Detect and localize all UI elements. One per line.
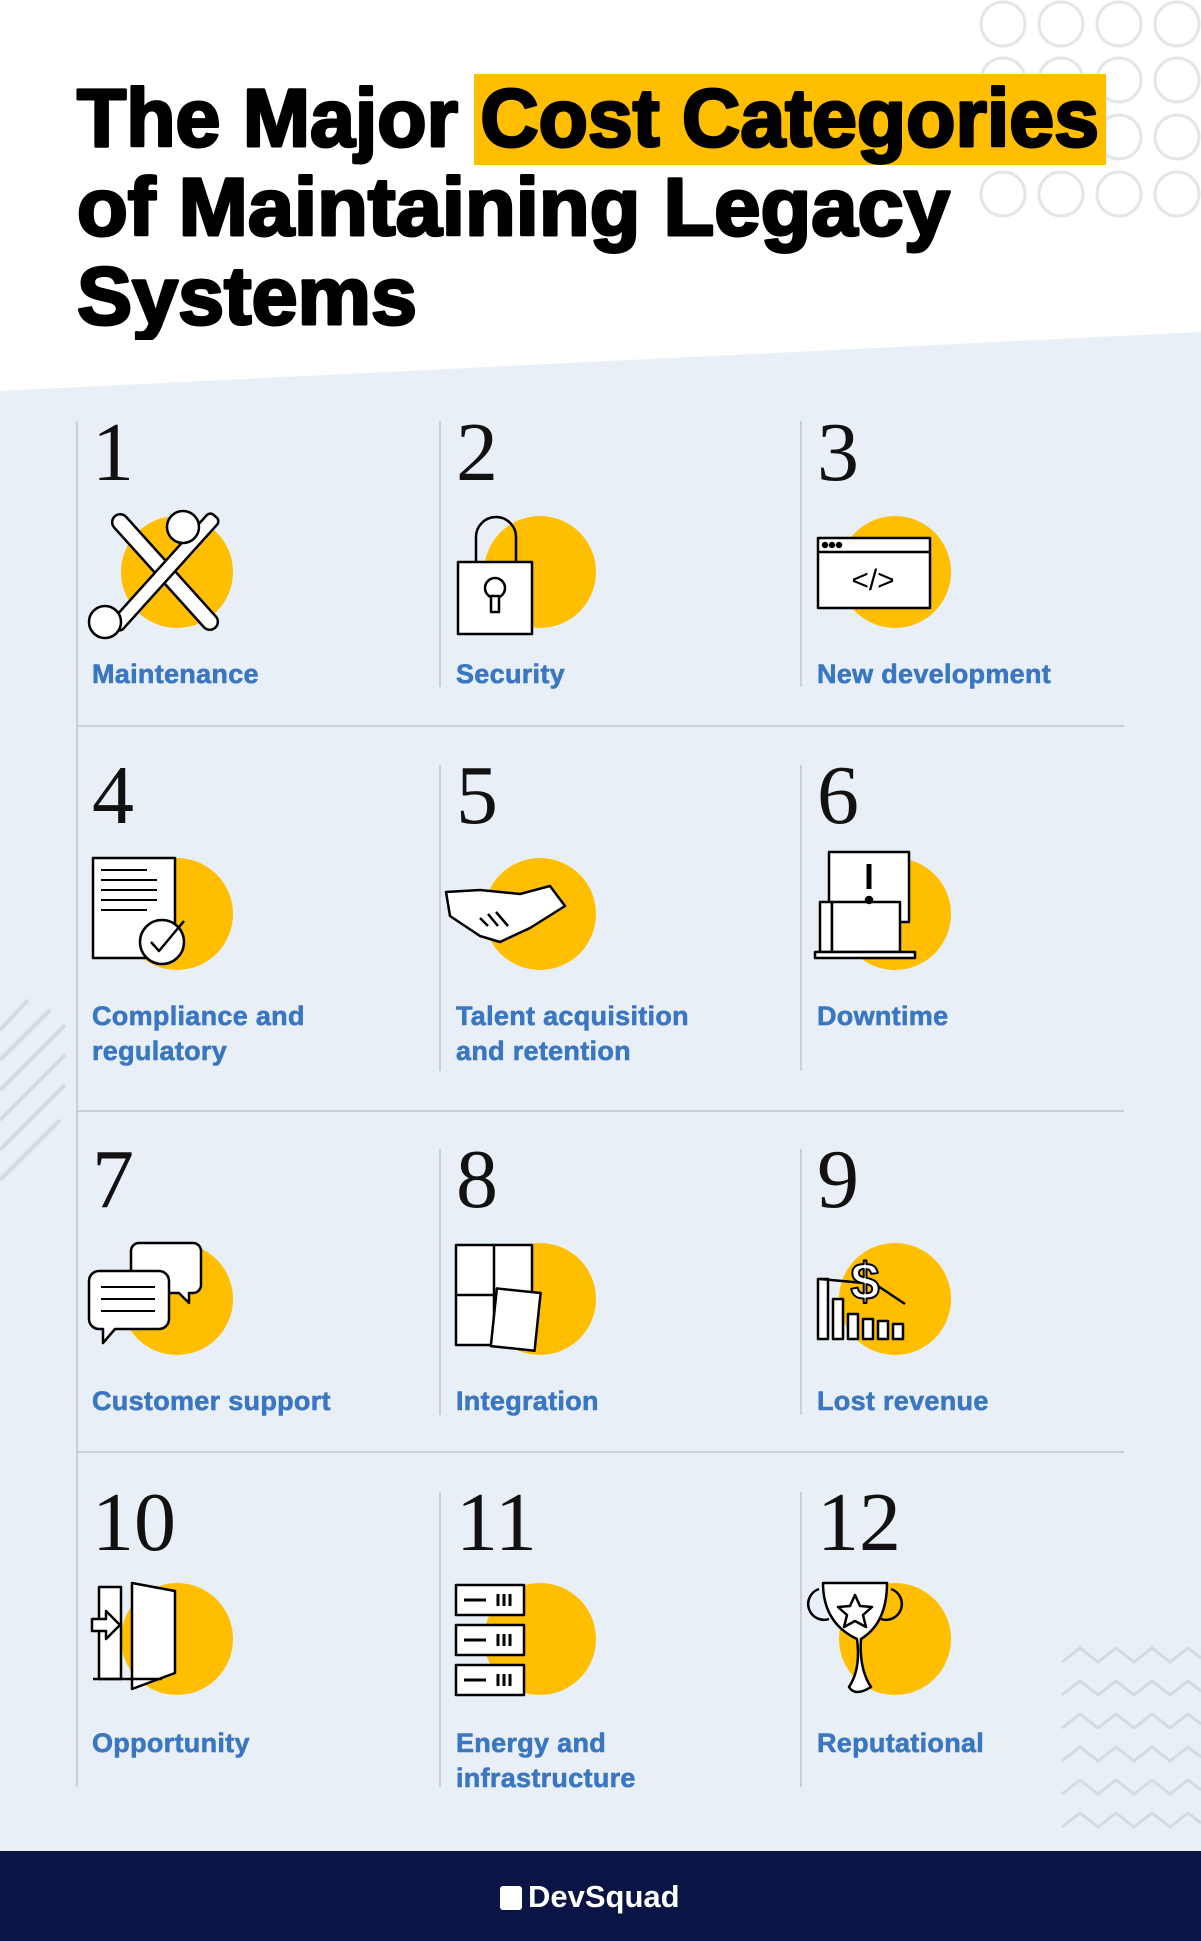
item 5: 5 bbox=[456, 749, 498, 842]
item 7 bbox=[92, 1133, 331, 1416]
item 8 bbox=[456, 1133, 599, 1416]
item 9 bbox=[817, 1133, 989, 1416]
item 6 bbox=[817, 749, 948, 1031]
title: The Major Cost Categories bbox=[77, 73, 1099, 164]
item 1 bbox=[92, 406, 259, 689]
icon: trophy bbox=[808, 1583, 951, 1695]
icon: monitor alert bbox=[815, 852, 951, 970]
item 7: 7 bbox=[92, 1133, 134, 1226]
item 11: infrastructure bbox=[456, 1763, 636, 1793]
item 1: Maintenance bbox=[92, 659, 259, 689]
icon: tools bbox=[89, 511, 233, 638]
icon: lock bbox=[458, 516, 596, 634]
icon: chat bubbles bbox=[89, 1243, 233, 1355]
item 4: regulatory bbox=[92, 1036, 227, 1066]
item 5: Talent acquisition bbox=[456, 1001, 689, 1031]
item 8: Integration bbox=[456, 1386, 599, 1416]
item 12: 12 bbox=[817, 1476, 901, 1569]
icon: document check bbox=[93, 858, 233, 970]
item 3 bbox=[817, 406, 1051, 689]
icon: code window bbox=[818, 516, 951, 628]
icon: puzzle bbox=[456, 1243, 596, 1355]
item 10: Opportunity bbox=[92, 1728, 250, 1758]
item 2: 2 bbox=[456, 406, 498, 499]
footer bbox=[0, 1851, 1201, 1941]
title bbox=[76, 73, 1106, 340]
item 11 bbox=[456, 1476, 636, 1793]
item 11: 11 bbox=[456, 1476, 537, 1569]
item 4: Compliance and bbox=[92, 1001, 305, 1031]
item 11: Energy and bbox=[456, 1728, 606, 1758]
title: Systems bbox=[77, 251, 417, 340]
item 6: 6 bbox=[817, 749, 859, 842]
item 3: New development bbox=[817, 659, 1051, 689]
item 4 bbox=[92, 749, 305, 1066]
icon: servers bbox=[456, 1583, 596, 1695]
icon: handshake bbox=[446, 858, 596, 970]
icon: revenue chart bbox=[818, 1243, 951, 1355]
item 12: Reputational bbox=[817, 1728, 984, 1758]
item 2 bbox=[456, 406, 565, 689]
item 3: 3 bbox=[817, 406, 859, 499]
item 8: 8 bbox=[456, 1133, 498, 1226]
icon: revenue chart: $ bbox=[851, 1253, 880, 1311]
icon: code window: </> bbox=[851, 564, 895, 597]
logo: DevSquad bbox=[528, 1879, 680, 1914]
icon: door bbox=[92, 1583, 233, 1695]
title: of Maintaining Legacy bbox=[77, 162, 950, 253]
item 10: 10 bbox=[92, 1476, 176, 1569]
item 5: and retention bbox=[456, 1036, 631, 1066]
item 12 bbox=[817, 1476, 984, 1758]
item 7: Customer support bbox=[92, 1386, 331, 1416]
item 9: 9 bbox=[817, 1133, 859, 1226]
item 9: Lost revenue bbox=[817, 1386, 989, 1416]
item 1: 1 bbox=[92, 406, 134, 499]
item 10 bbox=[92, 1476, 250, 1758]
item 2: Security bbox=[456, 659, 565, 689]
item 4: 4 bbox=[92, 749, 134, 842]
item 6: Downtime bbox=[817, 1001, 948, 1031]
item 5 bbox=[456, 749, 689, 1066]
